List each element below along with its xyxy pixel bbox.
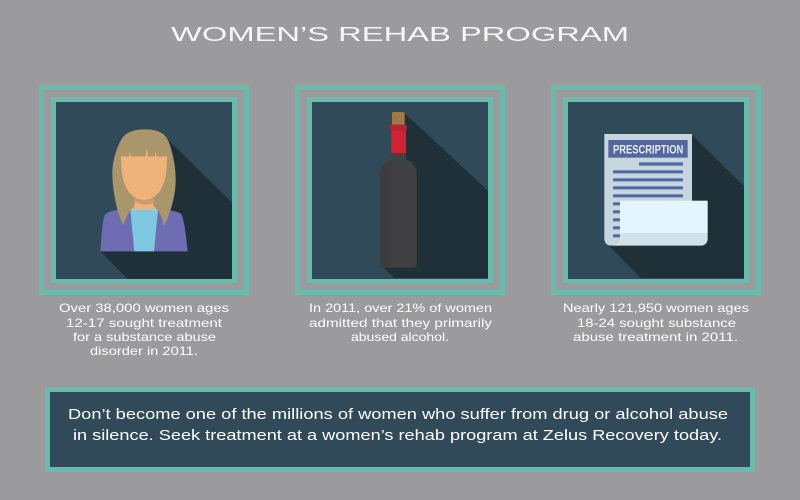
cork [392,112,405,125]
paper front [620,201,708,233]
caption: woman panel: disorder in 2011. [90,344,198,358]
long shadow [100,138,232,279]
panel background: woman [56,102,232,279]
panel: woman [42,88,246,292]
panel background: prescription [568,102,744,279]
long shadow [382,113,488,278]
callout text: Don’t become one of the millions of women who suffer from drug or alcohol abuse [68,406,728,423]
caption: prescription panel [563,301,749,344]
header band [608,140,688,158]
caption: bottle panel: admitted that they primarily [309,316,492,330]
shirt [130,210,158,251]
paper sheet [604,134,692,246]
header label: PRESCRIPTION [613,142,683,156]
title: WOMEN’S REHAB PROGRAM [171,23,629,46]
icon: wine bottle [380,112,488,278]
caption: prescription panel: Nearly 121,950 women ages [563,301,749,315]
panel: prescription [554,88,758,292]
text lines [613,162,683,237]
caption: woman panel: for a substance abuse [73,330,217,344]
long shadow [608,135,744,278]
panel frame: woman [42,88,246,292]
jacket [100,210,188,251]
callout box [48,390,752,470]
caption: prescription panel: 18-24 sought substance [577,316,737,330]
caption: woman panel: Over 38,000 women ages [59,301,229,315]
icon: woman [100,129,232,279]
bottle body [380,152,417,268]
foil collar [390,125,407,131]
panel frame: prescription [554,88,758,292]
caption: woman panel [59,301,229,358]
caption: bottle panel: abused alcohol. [351,330,449,344]
fringe notches [129,147,157,157]
paper fold [613,233,708,246]
panel frame: bottle [298,88,502,292]
neck [130,195,158,210]
caption: bottle panel [309,301,492,344]
foil [391,127,406,153]
callout [48,390,752,470]
icon: prescription [604,134,744,278]
caption: bottle panel: In 2011, over 21% of women [309,301,492,315]
caption: prescription panel: abuse treatment in 2011. [573,330,738,344]
face [121,156,167,200]
hair [112,129,176,226]
panel background: bottle [312,102,488,279]
callout text [68,406,728,444]
callout text: in silence. Seek treatment at a women’s rehab program at Zelus Recovery today. [73,427,722,444]
neck shadow [135,197,153,205]
panel: wine bottle [298,88,502,292]
bottle highlight [380,152,391,268]
caption: woman panel: 12-17 sought treatment [66,316,223,330]
